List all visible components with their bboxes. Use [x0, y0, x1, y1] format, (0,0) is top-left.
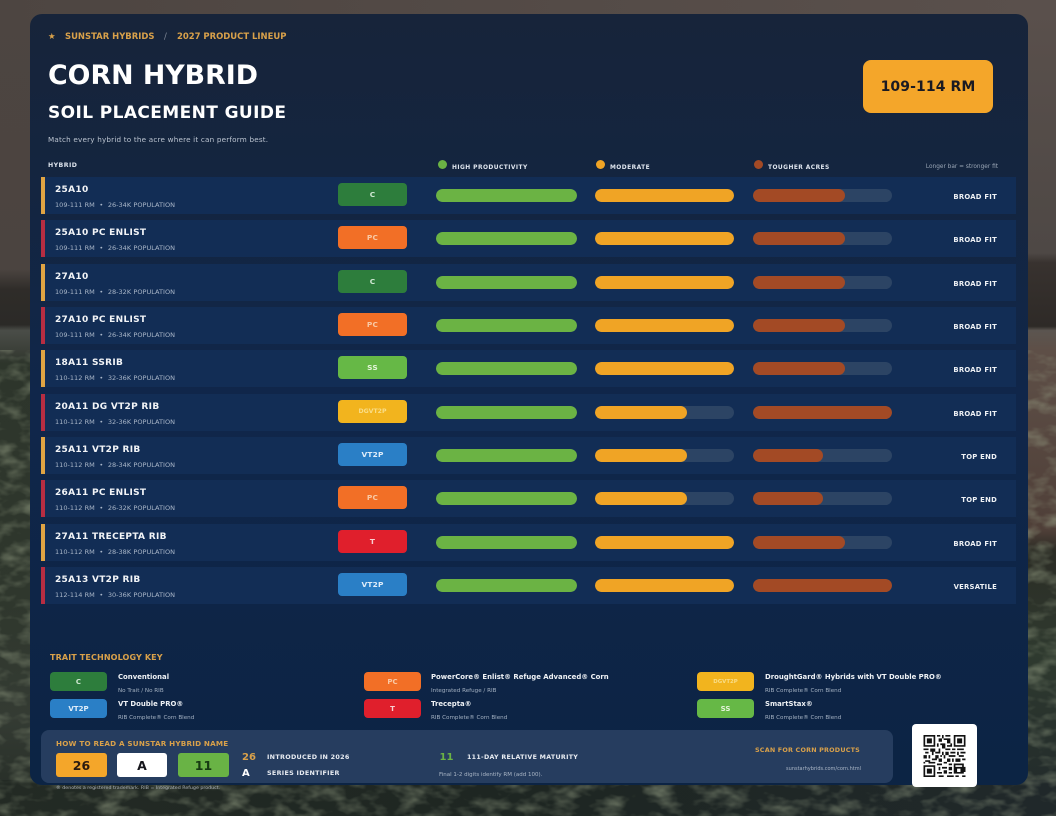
row: 25A11 VT2P RIB: 110-112 RM • 28-34K POPULATION: [55, 460, 175, 468]
row: 26A11 PC ENLIST: [41, 480, 1016, 517]
explain: 11: 111-DAY RELATIVE MATURITY: [467, 754, 578, 761]
row: 25A10: C: [370, 190, 375, 199]
explain: A: [242, 768, 340, 779]
key badge: DGVT2P: DGVT2P: [713, 678, 738, 684]
row: 25A10: 109-111 RM • 26-34K POPULATION: [55, 200, 175, 208]
key text: SmartStax: SmartStax®: [765, 700, 813, 708]
key text: conventional: No Trait / No RIB: [118, 688, 164, 694]
row: 27A10 PC ENLIST: BROAD FIT: [953, 323, 997, 331]
scan url: sunstarhybrids.com/corn.html: [786, 766, 861, 772]
row: 25A10 PC ENLIST: [41, 220, 1016, 257]
key text: Trecepta: Trecepta®: [431, 700, 472, 708]
key badge: SS: [697, 699, 754, 718]
key badge: C: [50, 672, 107, 691]
row: 25A11 VT2P RIB: TOP END: [961, 453, 997, 461]
key badge: T: T: [390, 704, 395, 712]
explain: A: A: [242, 768, 250, 779]
row: 27A10: BROAD FIT: [953, 280, 997, 288]
eyebrow: 2027 PRODUCT LINEUP: [177, 31, 286, 41]
row: 25A10: [41, 177, 1016, 214]
eyebrow: /: [164, 31, 167, 41]
row: 18A11 SSRIB: BROAD FIT: [953, 366, 997, 374]
row: 27A11 TRECEPTA RIB: [41, 524, 1016, 561]
row: 27A11 TRECEPTA RIB: BROAD FIT: [953, 540, 997, 548]
scan label: SCAN FOR CORN PRODUCTS: [755, 746, 860, 754]
key text: VT Double PRO: VT Double PRO®: [118, 700, 183, 708]
key badge: PC: PC: [387, 678, 398, 686]
key text: Trecepta: [431, 700, 507, 720]
row: 20A11 DG VT2P RIB: BROAD FIT: [953, 410, 997, 418]
legend note: Longer bar = stronger fit: [926, 164, 998, 170]
QR code: [912, 724, 977, 787]
tagline: Match every hybrid to the acre where it can perform best.: [48, 135, 268, 144]
row: 18A11 SSRIB: SS: [367, 363, 378, 372]
row: 25A10 PC ENLIST: 25A10 PC ENLIST: [55, 228, 146, 238]
row: 27A10 PC ENLIST: 109-111 RM • 26-34K POPULATION: [55, 330, 175, 338]
row: 18A11 SSRIB: [41, 350, 1016, 387]
row: 25A10: BROAD FIT: [953, 193, 997, 201]
title: CORN HYBRID: [48, 60, 258, 91]
row: 27A10 PC ENLIST: 27A10 PC ENLIST: [55, 314, 146, 324]
legend: tougher acres: [754, 160, 830, 170]
eyebrow: [48, 31, 286, 41]
row: 27A10: [41, 264, 1016, 301]
key badge: T: [364, 699, 421, 718]
explain: 26: [242, 752, 350, 763]
row: 27A10: 109-111 RM • 28-32K POPULATION: [55, 288, 175, 296]
row: 25A13 VT2P RIB: 25A13 VT2P RIB: [55, 574, 141, 584]
row: 25A10 PC ENLIST: BROAD FIT: [953, 236, 997, 244]
explain: 26: INTRODUCED IN 2026: [267, 753, 350, 761]
legend: moderate: [596, 160, 650, 170]
legend: tougher acres: TOUGHER ACRES: [768, 164, 830, 170]
explain: 26: 26: [242, 752, 256, 763]
key text: Trecepta: RIB Complete® Corn Blend: [431, 714, 507, 720]
key badge: PC: [364, 672, 421, 691]
row: 25A10: 25A10: [55, 184, 89, 194]
row: 25A10 PC ENLIST: PC: [367, 233, 378, 242]
row: 25A11 VT2P RIB: 25A11 VT2P RIB: [55, 444, 141, 454]
row: 25A11 VT2P RIB: VT2P: [361, 450, 384, 459]
panel: how to read: [41, 730, 893, 783]
key text: PowerCore: [431, 673, 609, 694]
row: 20A11 DG VT2P RIB: 20A11 DG VT2P RIB: [55, 402, 159, 412]
footnote: ® denotes a registered trademark. RIB = Integrated Refuge product.: [56, 786, 220, 791]
trait key heading: TRAIT TECHNOLOGY KEY: [50, 652, 163, 662]
key text: SmartStax: [765, 700, 841, 720]
row: 25A13 VT2P RIB: VT2P: [361, 580, 384, 589]
key badge: DGVT2P: [697, 672, 754, 691]
name part: 11: [178, 753, 229, 777]
row: 26A11 PC ENLIST: TOP END: [961, 496, 997, 504]
column header: hybrid: HYBRID: [48, 162, 77, 168]
name part: A: A: [137, 758, 147, 772]
row: 20A11 DG VT2P RIB: [41, 394, 1016, 431]
name part: 11: 11: [195, 758, 212, 772]
explain: A: SERIES IDENTIFIER: [267, 769, 340, 777]
key text: conventional: Conventional: [118, 673, 169, 681]
row: 20A11 DG VT2P RIB: 110-112 RM • 32-36K POPULATION: [55, 418, 175, 426]
row: 27A10 PC ENLIST: [41, 307, 1016, 344]
row: 26A11 PC ENLIST: 110-112 RM • 26-32K POPULATION: [55, 504, 175, 512]
row: 18A11 SSRIB: 18A11 SSRIB: [55, 358, 123, 368]
name part: 26: [56, 753, 107, 777]
row: 27A11 TRECEPTA RIB: 110-112 RM • 28-38K POPULATION: [55, 548, 175, 556]
key text: PowerCore: Integrated Refuge / RIB: [431, 688, 496, 694]
explain: 11: [440, 752, 578, 763]
row: 27A10: C: [370, 277, 375, 286]
legend: high productivity: HIGH PRODUCTIVITY: [452, 164, 528, 170]
row: 18A11 SSRIB: 110-112 RM • 32-36K POPULATION: [55, 374, 175, 382]
legend: moderate: MODERATE: [610, 164, 650, 170]
name part: 26: 26: [73, 758, 90, 772]
key text: DroughtGard: RIB Complete® Corn Blend: [765, 688, 841, 694]
key badge: C: C: [76, 678, 81, 686]
explain: 11: 11: [440, 752, 453, 763]
RM range badge: 109-114 RM: [881, 78, 975, 94]
key text: conventional: [118, 673, 169, 694]
key badge: VT2P: VT2P: [68, 704, 89, 712]
row: 25A13 VT2P RIB: [41, 567, 1016, 604]
row: 26A11 PC ENLIST: 26A11 PC ENLIST: [55, 488, 146, 498]
row: 27A10 PC ENLIST: PC: [367, 320, 378, 329]
how to read heading: HOW TO READ A SUNSTAR HYBRID NAME: [56, 739, 228, 748]
row: 25A13 VT2P RIB: 112-114 RM • 30-36K POPULATION: [55, 590, 175, 598]
key text: DroughtGard: DroughtGard® Hybrids with VT Double PRO®: [765, 673, 942, 681]
subtitle: SOIL PLACEMENT GUIDE: [48, 102, 286, 122]
eyebrow: ★: [48, 31, 56, 41]
row: 27A11 TRECEPTA RIB: T: [370, 537, 375, 546]
key text: VT Double PRO: [118, 700, 194, 720]
row: 26A11 PC ENLIST: PC: [367, 493, 378, 502]
row: 20A11 DG VT2P RIB: DGVT2P: [358, 408, 387, 415]
key text: VT Double PRO: RIB Complete® Corn Blend: [118, 714, 194, 720]
key badge: VT2P: [50, 699, 107, 718]
name part: A: [117, 753, 167, 777]
row: 27A11 TRECEPTA RIB: 27A11 TRECEPTA RIB: [55, 532, 167, 542]
key badge: SS: SS: [721, 704, 730, 712]
legend: high productivity: [438, 160, 528, 170]
row: 25A11 VT2P RIB: [41, 437, 1016, 474]
eyebrow: SUNSTAR HYBRIDS: [65, 31, 154, 41]
row: 25A13 VT2P RIB: VERSATILE: [954, 583, 997, 591]
RM range badge: [863, 60, 993, 113]
row: 25A10 PC ENLIST: 109-111 RM • 26-34K POPULATION: [55, 244, 175, 252]
explain note: Final 1-2 digits identify RM (add 100).: [439, 772, 542, 778]
key text: SmartStax: RIB Complete® Corn Blend: [765, 714, 841, 720]
row: 27A10: 27A10: [55, 272, 89, 282]
key text: PowerCore: PowerCore® Enlist® Refuge Advanced® Corn: [431, 673, 609, 681]
key text: DroughtGard: [765, 673, 942, 694]
